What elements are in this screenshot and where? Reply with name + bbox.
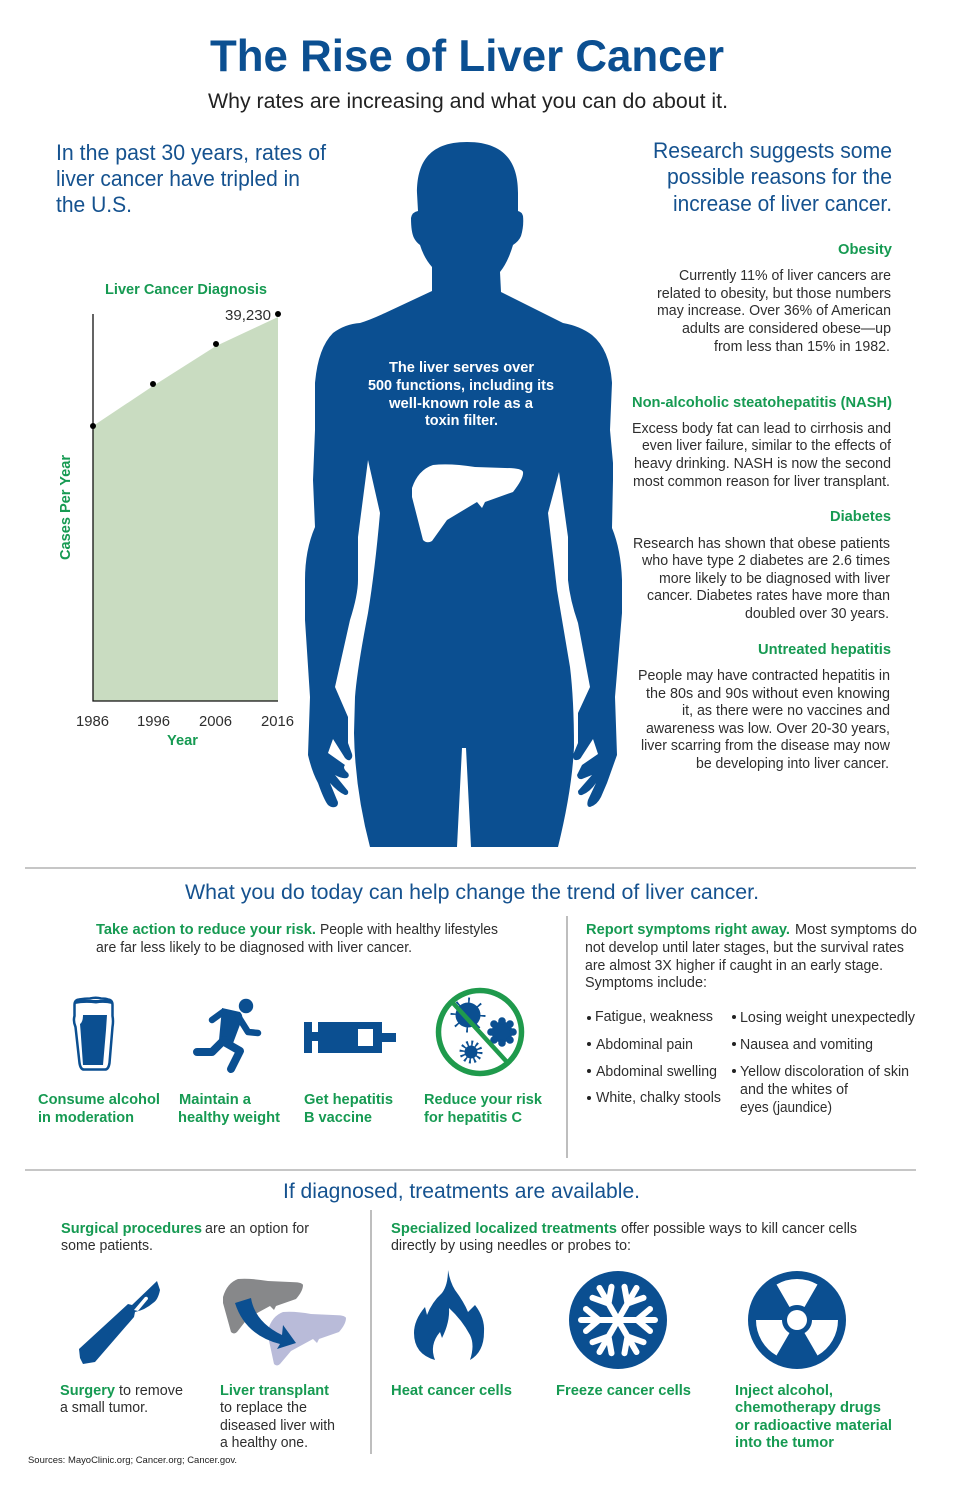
text block: take action: Take action to reduce your risk. — [96, 922, 316, 938]
icon labels: risk reduction: Maintain a — [179, 1092, 252, 1108]
x axis labels: 1986 — [76, 714, 109, 730]
text block: diabetes: cancer. Diabetes rates have more than — [647, 588, 890, 604]
left intro heading — [56, 140, 327, 217]
new liver — [268, 1312, 346, 1366]
chart title: Liver Cancer Diagnosis — [105, 282, 267, 298]
symptoms list: Nausea and vomiting — [740, 1037, 873, 1053]
data points — [90, 311, 281, 429]
label: liver transplant: Liver transplant — [220, 1383, 329, 1399]
icon: beer glass — [74, 998, 113, 1070]
icon: snowflake — [569, 1271, 667, 1369]
label: inject: Inject alcohol, — [735, 1383, 833, 1399]
icon: liver transplant — [223, 1279, 346, 1366]
text block: obesity — [657, 242, 892, 355]
text block: NASH: even liver failure, similar to the effects of — [642, 438, 892, 454]
symptoms list: Yellow discoloration of skin — [740, 1064, 909, 1080]
title: The Rise of Liver Cancer — [210, 32, 724, 81]
text block: diabetes: more likely to be diagnosed with liver — [659, 571, 890, 587]
sources: Sources: MayoClinic.org; Cancer.org; Cancer.gov. — [28, 1455, 237, 1466]
text block: NASH: Excess body fat can lead to cirrhosis and — [632, 421, 891, 437]
text block: report symptoms: Most symptoms do — [795, 922, 917, 938]
text block: untreated hepatitis: liver scarring from the disease may now — [641, 738, 891, 754]
prohibition sign — [438, 990, 522, 1074]
text block: diabetes — [633, 509, 891, 622]
text block: surgical procedures — [61, 1221, 309, 1254]
label: freeze cancer cells: Freeze cancer cells — [556, 1383, 691, 1399]
x axis labels: 2016 — [261, 714, 294, 730]
text block: untreated hepatitis: awareness was low. Over 20-30 years, — [646, 721, 890, 737]
label: surgery — [60, 1383, 183, 1416]
text block: NASH — [632, 395, 892, 490]
text block: take action — [96, 922, 498, 956]
chart area — [93, 317, 278, 701]
icon: running person — [197, 999, 258, 1069]
text block: NASH: Non-alcoholic steatohepatitis (NASH) — [632, 395, 892, 411]
label: inject — [735, 1383, 892, 1451]
text block: untreated hepatitis: be developing into liver cancer. — [696, 756, 889, 772]
left intro heading: the U.S. — [56, 192, 132, 217]
icon labels: risk reduction — [38, 1092, 543, 1126]
label: surgery: Surgery — [60, 1383, 115, 1399]
virus 2 — [487, 1017, 517, 1047]
label: surgery: to remove — [119, 1383, 183, 1399]
symptoms list: Abdominal swelling — [596, 1064, 717, 1080]
text block: report symptoms: Symptoms include: — [585, 975, 707, 991]
icon: flame — [414, 1270, 484, 1360]
left intro heading: In the past 30 years, rates of — [56, 140, 327, 165]
text block: untreated hepatitis: Untreated hepatitis — [758, 642, 891, 658]
right intro heading: Research suggests some — [653, 138, 892, 163]
text block: diabetes: who have type 2 diabetes are 2.6 times — [641, 553, 890, 569]
icon: scalpel — [79, 1281, 160, 1364]
text block: take action: People with healthy lifestyles — [320, 922, 498, 938]
label: liver transplant: to replace the — [220, 1400, 307, 1416]
symptoms list: Abdominal pain — [596, 1037, 693, 1053]
text block: report symptoms: are almost 3X higher if caught in an early stage. — [585, 958, 883, 974]
area chart: liver cancer diagnosis — [58, 282, 294, 749]
silhouette — [305, 142, 622, 847]
text block: NASH: most common reason for liver transplant. — [633, 474, 890, 490]
icon labels: risk reduction: Get hepatitis — [304, 1092, 393, 1108]
text block: NASH: heavy drinking. NASH is now the second — [634, 456, 891, 472]
symptoms list: Fatigue, weakness — [595, 1009, 713, 1025]
text block: obesity: Currently 11% of liver cancers are — [679, 268, 891, 284]
text block: obesity: Obesity — [838, 242, 892, 258]
data label: 39,230 — [225, 308, 271, 324]
text block: specialized treatments: directly by using needles or probes to: — [391, 1238, 631, 1254]
icon labels: risk reduction: Reduce your risk — [424, 1092, 543, 1108]
x axis labels: 2006 — [199, 714, 232, 730]
text block: obesity: from less than 15% in 1982. — [714, 339, 890, 355]
text block: obesity: related to obesity, but those numbers — [657, 286, 891, 302]
icon: syringe — [304, 1022, 396, 1053]
virus 1 — [454, 1001, 482, 1029]
text block: diabetes: doubled over 30 years. — [745, 606, 889, 622]
right intro heading: increase of liver cancer. — [673, 191, 892, 216]
right intro heading — [653, 138, 892, 216]
text block: untreated hepatitis — [638, 642, 891, 772]
text block: untreated hepatitis: People may have contracted hepatitis in — [638, 668, 890, 684]
icon labels: risk reduction: for hepatitis C — [424, 1110, 523, 1126]
text block: untreated hepatitis: the 80s and 90s without even knowing — [646, 686, 890, 702]
symptoms list: Losing weight unexpectedly — [740, 1010, 916, 1026]
text block: untreated hepatitis: it, as there were no vaccines and — [682, 703, 890, 719]
section heading: treatments: If diagnosed, treatments are available. — [283, 1180, 640, 1203]
transfer arrow — [235, 1298, 296, 1349]
label: inject: chemotherapy drugs — [735, 1400, 881, 1416]
label: inject: or radioactive material — [735, 1418, 892, 1434]
text block: diabetes: Research has shown that obese patients — [633, 536, 890, 552]
liver caption: toxin filter. — [425, 413, 498, 429]
icon labels: risk reduction: Consume alcohol — [38, 1092, 160, 1108]
liver caption — [368, 360, 554, 429]
label: surgery: a small tumor. — [60, 1400, 148, 1416]
icon labels: risk reduction: healthy weight — [178, 1110, 280, 1126]
old liver — [223, 1279, 303, 1334]
text block: report symptoms: Report symptoms right away. — [586, 922, 790, 938]
text block: specialized treatments: Specialized localized treatments — [391, 1221, 617, 1237]
x axis title: Year — [167, 733, 198, 749]
text block: obesity: may increase. Over 36% of American — [657, 303, 891, 319]
text block: report symptoms — [585, 922, 917, 991]
symptoms list: eyes (jaundice) — [740, 1100, 832, 1116]
section heading: change the trend: What you do today can help change the trend of liver cancer. — [185, 881, 759, 904]
text block: surgical procedures: some patients. — [61, 1238, 153, 1254]
body silhouette with liver — [305, 142, 622, 847]
icon labels: risk reduction: B vaccine — [304, 1110, 372, 1126]
left intro heading: liver cancer have tripled in — [56, 166, 300, 191]
label: liver transplant: a healthy one. — [220, 1435, 308, 1451]
x axis labels: 1996 — [137, 714, 170, 730]
text block: report symptoms: not develop until later stages, but the survival rates — [585, 940, 904, 956]
label: liver transplant — [220, 1383, 335, 1451]
icon labels: risk reduction: in moderation — [38, 1110, 134, 1126]
text block: surgical procedures: are an option for — [205, 1221, 309, 1237]
liver shape — [412, 464, 523, 542]
liver caption: well-known role as a — [388, 396, 534, 412]
text block: surgical procedures: Surgical procedures — [61, 1221, 202, 1237]
text block: specialized treatments: offer possible ways to kill cancer cells — [621, 1221, 857, 1237]
liver caption: The liver serves over — [389, 360, 534, 376]
y axis title: Cases Per Year — [58, 455, 74, 560]
icon: radiation — [748, 1271, 846, 1369]
x axis labels — [76, 714, 294, 730]
text block: obesity: adults are considered obese—up — [682, 321, 891, 337]
label: heat cancer cells: Heat cancer cells — [391, 1383, 512, 1399]
label: liver transplant: diseased liver with — [220, 1418, 335, 1434]
symptoms list: White, chalky stools — [596, 1090, 721, 1106]
symptoms list — [587, 1009, 916, 1116]
label: inject: into the tumor — [735, 1435, 834, 1451]
subtitle: Why rates are increasing and what you can do about it. — [208, 90, 728, 113]
symptoms list: and the whites of — [740, 1082, 849, 1098]
icon: no hepatitis C viruses — [438, 990, 522, 1074]
right intro heading: possible reasons for the — [667, 164, 892, 189]
chart axes — [93, 314, 278, 701]
text block: take action: are far less likely to be diagnosed with liver cancer. — [96, 940, 412, 956]
text block: diabetes: Diabetes — [830, 509, 891, 525]
liver caption: 500 functions, including its — [368, 378, 554, 394]
virus 3 — [462, 1044, 480, 1060]
text block: specialized treatments — [391, 1221, 857, 1254]
